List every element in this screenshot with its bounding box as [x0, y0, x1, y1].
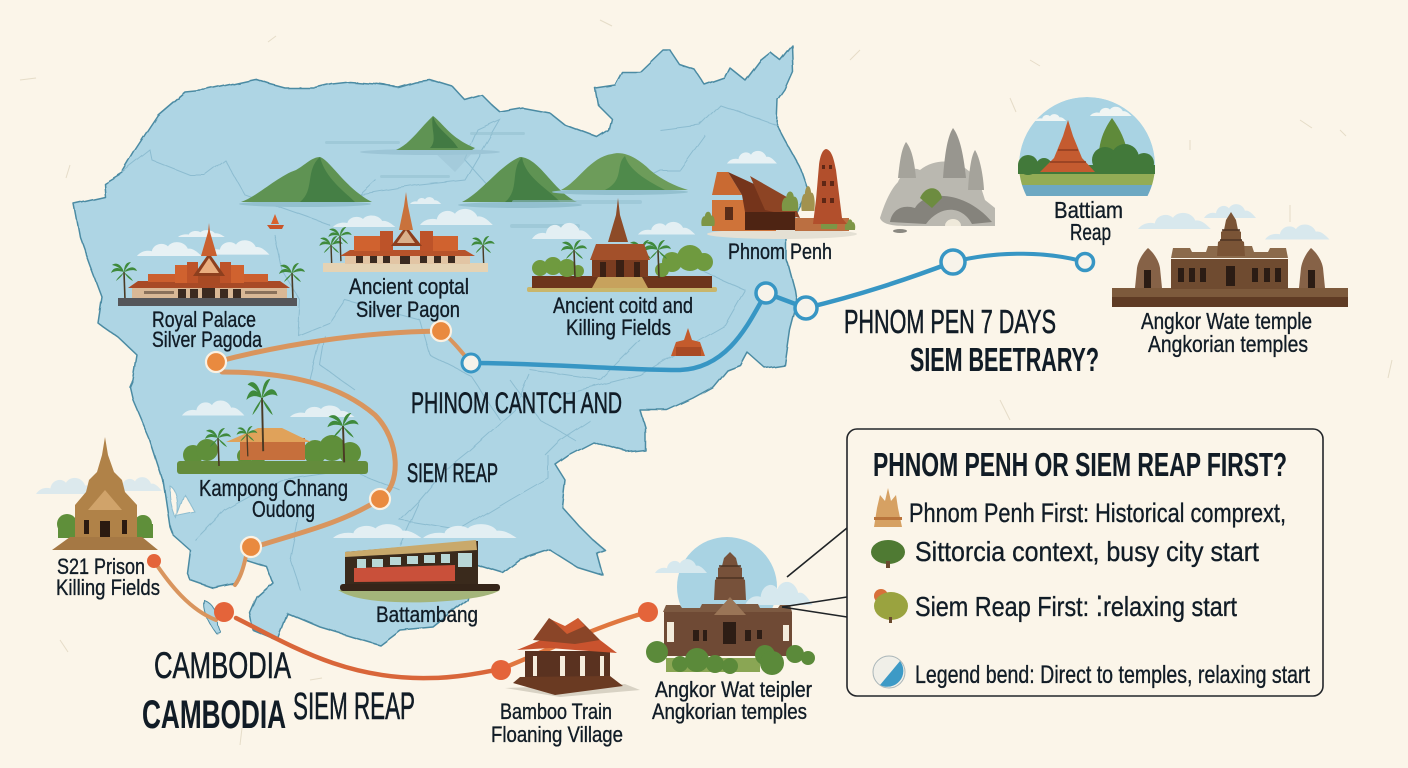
- label: Ancient capital: Silver Pagon: [356, 297, 460, 322]
- heading: Phnom Pen 7 days: SIEM BEETRARY?: [910, 341, 1099, 378]
- text: legend: Legend bend: Direct to temples, relaxing start: [915, 661, 1310, 689]
- mountain right: [552, 153, 688, 195]
- heading: Phnom Pen 7 days: PHNOM PEN 7 DAYS: [844, 303, 1056, 340]
- label: Phnom Penh: Phnom Penh: [728, 239, 832, 264]
- icon: legend circle: [873, 656, 905, 688]
- map of Cambodia: [74, 45, 808, 645]
- label: Ancient capital and Killing Fields: Ancient coitd and: [553, 293, 693, 318]
- label: Angkor Wat lower: Angkorian temples: [652, 699, 807, 724]
- illustration: circular temple scene: [1018, 97, 1155, 196]
- label: Battiam Reap: Reap: [1070, 219, 1111, 245]
- label: Battiam Reap: [1054, 197, 1123, 245]
- label: Ancient capital: Ancient coptal: [349, 274, 469, 299]
- mountains on the map: [239, 116, 688, 228]
- illustration: small temple: [671, 328, 705, 356]
- label: Battambang: Battambang: [376, 602, 478, 627]
- mountain left: [239, 157, 372, 207]
- label: Kampong Chhnang: Kampong Chnang: [199, 475, 348, 501]
- label: Bamboo Train: [491, 699, 623, 747]
- illustration: Kampong Chhnang island: [177, 379, 368, 474]
- heading: Phinom Cantch and: PHINOM CANTCH AND: [411, 387, 622, 420]
- panel: Phnom Penh or Siem Reap first: [847, 429, 1323, 696]
- label: Ancient capital and Killing Fields: Killing Fields: [566, 315, 671, 340]
- heading: Siem Reap on map: SIEM REAP: [407, 458, 498, 488]
- label: Angkor Wat temple right: Angkorian temples: [1148, 331, 1308, 357]
- text: Siem Reap first: Siem Reap First: ⁚relaxing start: [915, 591, 1237, 622]
- illustration: Phnom Penh landmarks: [701, 149, 857, 239]
- illustration: Ancient capital palace: [319, 192, 495, 272]
- label: Ancient capital: [349, 274, 469, 322]
- illustration: Angkor Wat lower: [646, 537, 815, 675]
- label: Battiam Reap: Battiam: [1054, 197, 1123, 223]
- label: Bamboo Train: Floaning Village: [491, 722, 623, 747]
- illustration: bamboo house: [505, 618, 640, 697]
- illustration: bamboo train: [333, 524, 517, 602]
- heading: Siem Reap bottom: SIEM REAP: [293, 686, 415, 728]
- illustration: Angkor Wat right: [1112, 204, 1348, 307]
- icon: green tree: [871, 540, 905, 568]
- illustration: Royal Palace: [111, 223, 305, 306]
- icon: temple: [874, 488, 902, 527]
- heading: Cambodia: CAMBODIA: [142, 693, 286, 737]
- route: blue main line: [471, 254, 1085, 370]
- label: Royal Palace: [152, 307, 263, 352]
- water haze: [325, 132, 642, 228]
- icon: small boat: [267, 214, 284, 229]
- icon: autumn tree: [874, 589, 908, 623]
- label: Angkor Wat lower: [652, 677, 812, 724]
- label: Kampong Chhnang: Oudong: [252, 496, 315, 522]
- label: Angkor Wat temple right: [1141, 308, 1312, 357]
- label: S21 Prison: Killing Fields: [56, 575, 160, 600]
- mountain far: [360, 116, 500, 172]
- heading: Cambodia: CAMBODIA: [154, 645, 291, 686]
- label: Royal Palace: Silver Pagoda: [152, 327, 263, 352]
- label: Angkor Wat temple right: Angkor Wate temple: [1141, 308, 1312, 334]
- heading: Cambodia: [142, 645, 291, 737]
- label: Bamboo Train: Bamboo Train: [500, 699, 612, 724]
- text: Phnom Penh first: Phnom Penh First: Historical comprext,: [909, 498, 1286, 528]
- illustration: S21 temple: [36, 437, 162, 550]
- label: S21 Prison: S21 Prison: [57, 554, 145, 579]
- route: orange western loop: [154, 331, 470, 620]
- heading: Phnom Pen 7 days: [844, 303, 1099, 378]
- label: Ancient capital and Killing Fields: [553, 293, 693, 340]
- label: Angkor Wat lower: Angkor Wat teipler: [655, 677, 812, 702]
- text: historical context: Sittorcia context, busy city start: [915, 536, 1259, 567]
- label: S21 Prison: [56, 554, 160, 600]
- label: Kampong Chhnang: [199, 475, 348, 522]
- connector lines to panel: [782, 528, 847, 617]
- illustration: temple with trees: [527, 198, 717, 292]
- label: Royal Palace: Royal Palace: [152, 307, 256, 332]
- route: red southern link: [236, 612, 648, 678]
- route nodes: [147, 250, 1094, 680]
- mountain centre: [458, 157, 582, 208]
- illustration: rock temple: [880, 128, 995, 233]
